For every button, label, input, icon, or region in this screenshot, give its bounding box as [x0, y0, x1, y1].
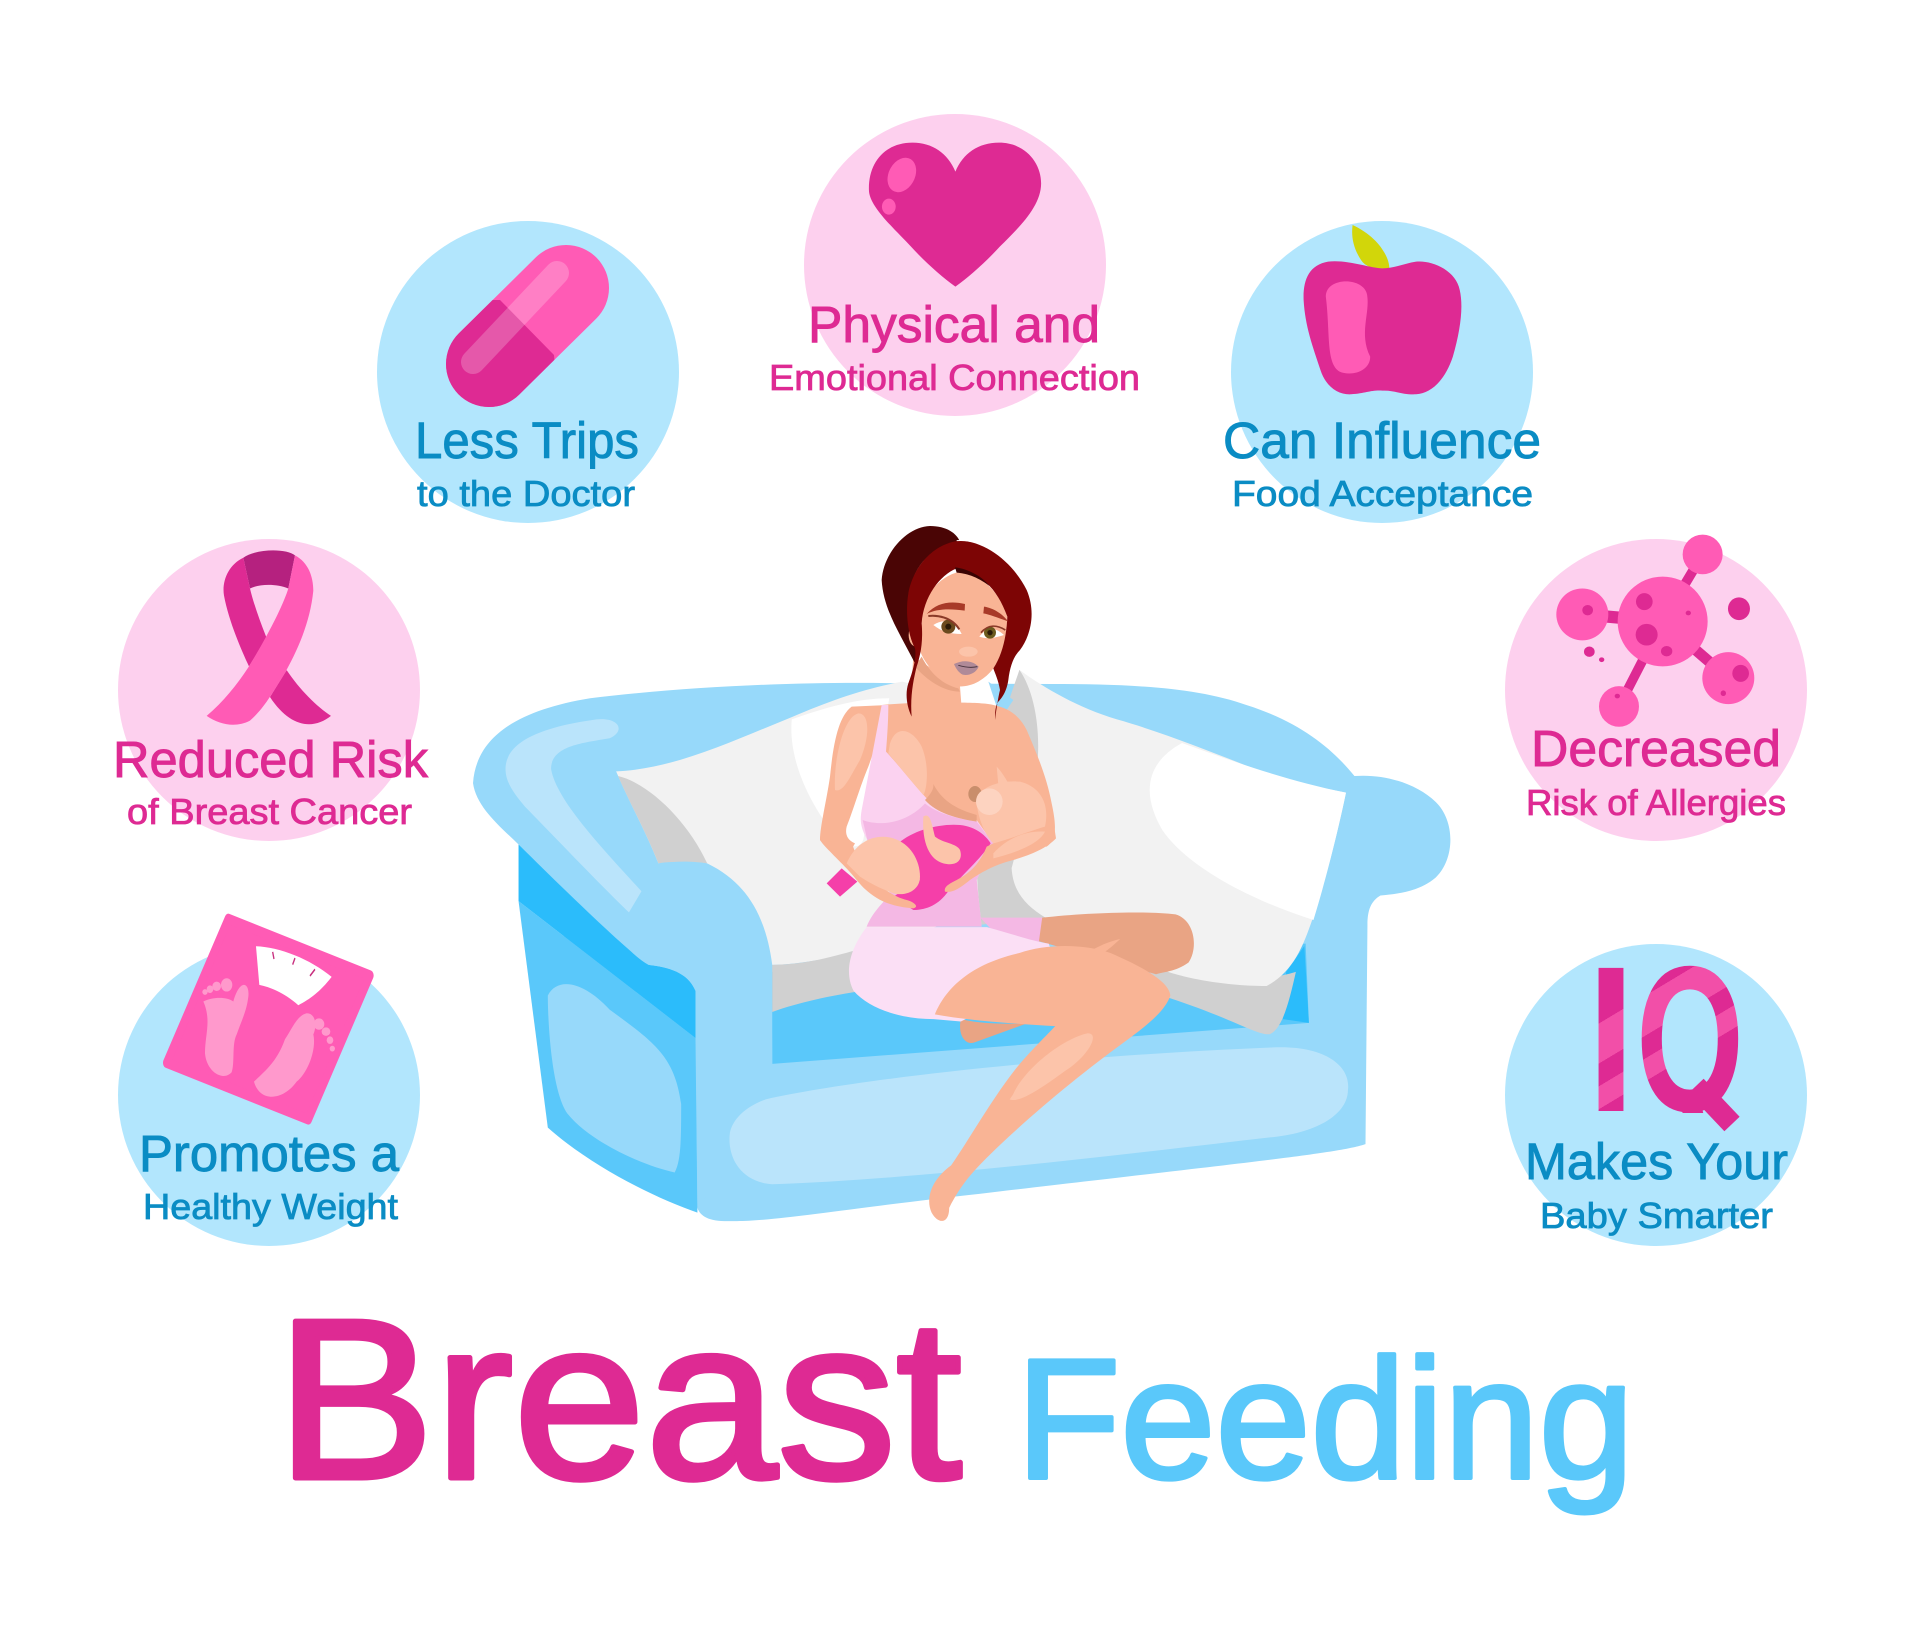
- nose: [959, 647, 978, 657]
- arm highlight: [835, 713, 867, 790]
- blue behind neck: [988, 682, 1013, 710]
- baby hand: [997, 767, 1010, 787]
- circle: blue background: [377, 221, 679, 523]
- icon: apple: [1304, 225, 1461, 394]
- baby onesie: [893, 825, 991, 910]
- mother's right forearm: [945, 810, 1056, 892]
- panel: reduced risk of breast cancer: [113, 539, 428, 841]
- face: [920, 572, 1007, 686]
- subheading: risk of allergies: Risk of Allergies: [1526, 782, 1786, 823]
- icon: striped IQ letters: [1598, 966, 1740, 1132]
- sofa side inset: [548, 984, 681, 1172]
- left pillow lower shadow: [772, 948, 863, 1012]
- baby head: [977, 781, 1046, 843]
- dress shadow: [863, 803, 993, 927]
- right eyebrow: [983, 607, 1008, 621]
- sofa seat recess: [772, 944, 1309, 1064]
- subheading: to the doctor: to the Doctor: [417, 473, 635, 514]
- title word: feeding: Feeding: [1016, 1324, 1634, 1515]
- panel: can influence food acceptance: [1223, 221, 1541, 523]
- back foot: [960, 1019, 1026, 1043]
- heading: can influence: Can Influence: [1223, 412, 1541, 469]
- forearm highlight: [993, 831, 1045, 858]
- subheading: of breast cancer: of Breast Cancer: [127, 791, 412, 832]
- sofa seat cushion: [729, 1047, 1348, 1184]
- lips: [954, 661, 979, 675]
- left arm: [820, 705, 888, 863]
- panel: promotes a healthy weight: [118, 919, 420, 1246]
- circle: blue background: [1505, 944, 1807, 1246]
- heading: promotes a: Promotes a: [139, 1125, 400, 1182]
- hair bun: [882, 526, 960, 667]
- dress bodice: [861, 705, 993, 927]
- left pillow shadow: [618, 776, 707, 863]
- illustration: mother's legs and skirt: [849, 912, 1194, 1221]
- icon: heart: [869, 143, 1041, 287]
- shoulder highlight: [888, 731, 927, 795]
- circle: blue background: [1231, 221, 1533, 523]
- sofa left side shadow: [519, 844, 695, 1038]
- left pillow highlight: [791, 698, 889, 846]
- breast shadow: [925, 784, 977, 822]
- sofa front left arm: [616, 862, 772, 1208]
- dress skirt: [849, 927, 1058, 1021]
- panel: makes your baby smarter: [1505, 924, 1807, 1246]
- heading: decreased: Decreased: [1531, 720, 1781, 777]
- subheading: food acceptance: Food Acceptance: [1232, 473, 1533, 514]
- dress back fold: [980, 918, 1043, 946]
- icon: weighing scale: [167, 919, 370, 1119]
- circle: pink background: [1505, 539, 1807, 841]
- left pillow: [616, 682, 1045, 965]
- sofa back arm highlight: [506, 719, 662, 929]
- sofa right recess shadow: [1283, 946, 1309, 1023]
- left eyebrow: [927, 603, 965, 614]
- ear: [909, 623, 923, 647]
- subheading: emotional connection: Emotional Connection: [769, 357, 1140, 398]
- sofa body: [473, 683, 1450, 1221]
- sofa left side panel: [519, 901, 697, 1213]
- baby foot strap: [827, 868, 857, 897]
- subheading: healthy weight: Healthy Weight: [143, 1186, 398, 1227]
- illustration: sofa: [473, 670, 1450, 1221]
- circle: pink background: [804, 114, 1106, 416]
- icon: striped IQ letters: Q: [1636, 924, 1744, 1156]
- hand on knee: [1088, 939, 1120, 958]
- jaw shadow: [915, 657, 960, 692]
- circle: pink background: [118, 539, 420, 841]
- back leg: [1039, 912, 1194, 974]
- gap behind neck: [953, 682, 1007, 710]
- subheading: baby smarter: Baby Smarter: [1540, 1195, 1773, 1236]
- right pillow lower shadow: [1150, 962, 1296, 1034]
- heading: physical and: Physical and: [808, 296, 1100, 353]
- areola: [968, 786, 982, 802]
- hair shine: [957, 541, 1005, 557]
- left eye: [928, 616, 962, 634]
- panel: less trips to the doctor: [377, 221, 679, 523]
- right pillow: [980, 670, 1346, 986]
- baby arm: [923, 815, 961, 864]
- right pillow highlight: [1150, 743, 1346, 920]
- icon: ribbon: [207, 550, 331, 725]
- title: [276, 1273, 1634, 1527]
- icon: allergen molecule: [1556, 535, 1754, 727]
- right pillow side shadow: [974, 670, 1045, 925]
- right eye: [979, 626, 1005, 639]
- front leg highlight: [1010, 1033, 1093, 1100]
- heading: makes your: Makes Your: [1525, 1133, 1788, 1190]
- panel: physical and emotional connection: [769, 114, 1140, 416]
- neck: [907, 657, 962, 708]
- heading: reduced risk: Reduced Risk: [113, 731, 428, 788]
- heading: less trips: Less Trips: [415, 412, 639, 469]
- mother's left forearm: [820, 840, 916, 908]
- icon: striped IQ letters: I: [1587, 924, 1635, 1156]
- hair front: [907, 541, 1032, 720]
- panel: decreased risk of allergies: [1505, 535, 1807, 841]
- illustration: mother and baby: [820, 526, 1056, 927]
- hair part shadow: [955, 567, 989, 586]
- title word: breast: Breast: [276, 1273, 962, 1527]
- torso: [880, 702, 1055, 847]
- baby leg: [847, 837, 920, 894]
- icon: pill: [473, 273, 566, 364]
- front leg: [929, 946, 1170, 1221]
- baby ear highlight: [976, 788, 1003, 815]
- circle: blue background: [118, 944, 420, 1246]
